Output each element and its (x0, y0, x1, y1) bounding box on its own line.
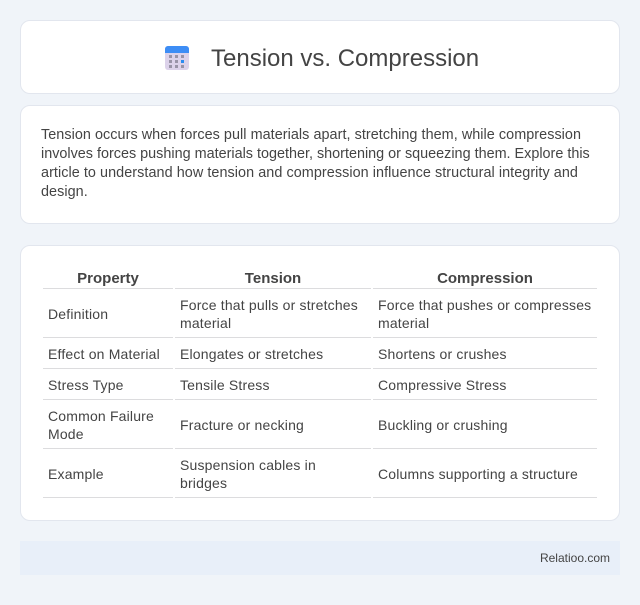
comparison table: Stress Type (48, 377, 124, 393)
comparison table: Common Failure (48, 408, 154, 424)
comparison table (43, 270, 597, 498)
intro text: design. (41, 184, 88, 200)
intro text: article to understand how tension and compression influence structural integrity and (41, 165, 578, 181)
comparison table: Example (48, 466, 104, 482)
footer text: Relatioo.com (540, 551, 610, 565)
comparison table: Property (77, 270, 139, 287)
intro text (41, 127, 590, 200)
comparison table: Shortens or crushes (378, 346, 507, 362)
comparison table: Elongates or stretches (180, 346, 323, 362)
panel: table card (20, 245, 620, 521)
footer bar (20, 541, 620, 575)
comparison table: Fracture or necking (180, 417, 304, 433)
icon: calendar (165, 46, 189, 70)
comparison table: bridges (180, 475, 227, 491)
comparison table: Suspension cables in (180, 457, 316, 473)
title: Tension vs. Compression (211, 45, 479, 72)
intro text: involves forces pushing materials together, shortening or squeezing them. Explore this (41, 146, 590, 162)
comparison table: material (378, 315, 429, 331)
comparison table: Columns supporting a structure (378, 466, 578, 482)
comparison table: Buckling or crushing (378, 417, 508, 433)
comparison table: material (180, 315, 231, 331)
comparison table: Definition (48, 306, 108, 322)
comparison table: Force that pushes or compresses (378, 297, 591, 313)
panel: title card (20, 20, 620, 94)
comparison table: Compressive Stress (378, 377, 506, 393)
comparison table: Mode (48, 426, 84, 442)
comparison table: Effect on Material (48, 346, 160, 362)
comparison table: Tension (245, 270, 301, 287)
intro text: Tension occurs when forces pull materials apart, stretching them, while compression (41, 127, 581, 143)
comparison table: Compression (437, 270, 533, 287)
comparison table: Force that pulls or stretches (180, 297, 358, 313)
comparison table: Tensile Stress (180, 377, 270, 393)
panel: intro card (20, 105, 620, 224)
